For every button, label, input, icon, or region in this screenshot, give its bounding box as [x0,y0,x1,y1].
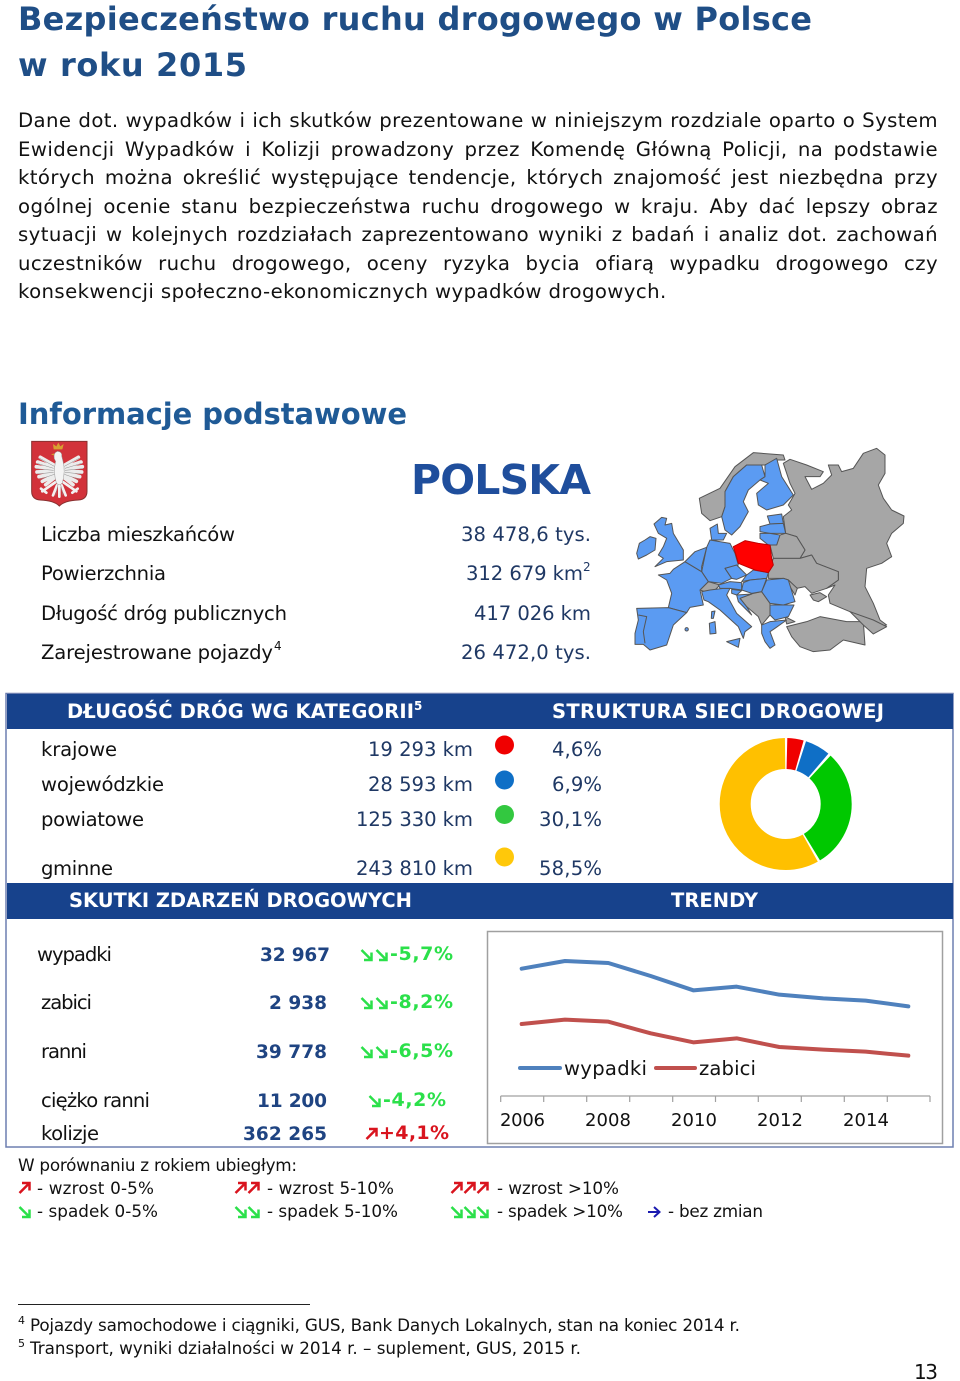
heading: Informacje podstawowe: Informacje podstawowe [18,397,407,431]
table: road lengths by category: gminne [41,857,113,880]
body text paragraph: konsekwencji społeczno-ekonomicznych wypadków drogowych. [18,280,667,303]
chart axis: 2006 [500,1110,545,1131]
legend: year over year comparison: - spadek 5-10% [267,1201,398,1221]
body text paragraph [18,109,938,303]
table: basic information: 312 679 km [466,562,583,585]
chart axis: 2010 [671,1110,717,1131]
table: basic information: 26 472,0 tys. [461,641,591,664]
table: road accident effects: 32 967 [260,945,330,966]
header bar: road lengths and network structure: DŁUGOŚĆ DRÓG WG KATEGORII [67,699,414,723]
table: basic information: 417 026 km [474,602,591,625]
legend: year over year comparison: - wzrost 5-10% [267,1178,394,1198]
table: road accident effects: ranni [41,1040,87,1063]
table: road lengths by category: 243 810 km [356,857,473,880]
map: Poland highlighted [733,541,773,573]
body text paragraph: uczestników ruchu drogowego, oceny ryzyka bycia ofiarą wypadku drogowego czy [18,252,938,274]
header bar: road lengths and network structure: STRUKTURA SIECI DROGOWEJ [552,700,884,723]
footnotes [18,1304,740,1358]
donut chart: road network structure [735,754,836,854]
table: road lengths by category: 58,5% [539,857,602,880]
body text paragraph: których można określić występujące tendencje, których znajomość jest niezbędna przy [18,166,938,189]
icon: Polish coat of arms [32,441,87,506]
table: road accident effects: 39 778 [256,1042,327,1063]
table: road accident effects: +4,1% [379,1122,449,1144]
map of Europe [635,448,904,652]
chart axis: 2014 [843,1110,889,1131]
table: basic information: Zarejestrowane pojazdy [41,641,273,664]
chart line: zabici [522,1020,908,1056]
body text paragraph: sytuacji w kolejnych rozdziałach zaprezentowano wyniki z badań i analiz dot. zachowań [18,223,938,246]
title: w roku 2015 [18,46,247,84]
table: basic information: Liczba mieszkańców [41,523,235,546]
table: road lengths by category: krajowe [41,738,117,761]
legend: year over year comparison: - bez zmian [668,1201,763,1221]
footnotes: 5 [18,1337,25,1350]
table: road accident effects: -5,7% [390,943,453,965]
header bar: road lengths and network structure: 5 [414,699,422,713]
table: road lengths by category [41,736,602,880]
table: road lengths by category: 6,9% [552,773,602,796]
table: road accident effects: ciężko ranni [41,1089,150,1112]
legend: year over year comparison [18,1155,763,1221]
legend: year over year comparison: W porównaniu z rokiem ubiegłym: [18,1155,297,1175]
footnotes: Transport, wyniki działalności w 2014 r. – suplement, GUS, 2015 r. [29,1338,581,1358]
title [18,0,812,84]
chart axis: 2012 [757,1110,803,1131]
legend: year over year comparison: - wzrost >10% [497,1178,619,1198]
table: road accident effects: 2 938 [269,993,327,1014]
body text paragraph: ogólnej ocenie stanu bezpieczeństwa ruchu drogowego w kraju. Aby dać lepszy obraz [18,194,938,218]
table: road accident effects: -6,5% [390,1040,453,1062]
map: EU countries [635,458,795,650]
title: Bezpieczeństwo ruchu drogowego w Polsce [18,0,812,38]
table: basic information: Długość dróg publicznych [41,602,287,625]
table: road lengths by category: powiatowe [41,808,144,831]
table: road lengths by category: 4,6% [552,738,602,761]
table: basic information: 2 [583,560,591,574]
table: road lengths by category: wojewódzkie [41,773,164,796]
body text paragraph: Dane dot. wypadków i ich skutków prezentowane w niniejszym rozdziale oparto o System [18,109,938,132]
chart axis: 2008 [585,1110,631,1131]
chart axis [500,1096,930,1131]
header bar: effects and trends [7,883,953,919]
line chart: trends [488,932,942,1144]
table: road accident effects: 362 265 [243,1124,327,1145]
table: basic information: 38 478,6 tys. [461,523,591,546]
table: basic information: Powierzchnia [41,562,166,585]
header bar: effects and trends: TRENDY [671,889,759,912]
table: road accident effects: -4,2% [383,1089,446,1111]
heading: POLSKA: POLSKA [411,456,591,504]
table: road lengths by category: 28 593 km [368,773,473,796]
chart line: wypadki [522,961,908,1006]
outer frame [6,694,953,1147]
footnotes: Pojazdy samochodowe i ciągniki, GUS, Bank Danych Lokalnych, stan na koniec 2014 r. [30,1315,740,1335]
table: road accident effects: kolizje [41,1122,99,1145]
table: basic information [41,523,591,664]
legend: year over year comparison: - spadek >10% [497,1201,623,1221]
footnotes: 4 [18,1314,25,1327]
chart legend [520,1057,756,1080]
trend indicators [362,950,386,1106]
table: road lengths by category: 125 330 km [356,808,473,831]
map: non-EU countries [699,448,904,652]
table: road accident effects: zabici [41,991,92,1014]
table: basic information: 4 [274,639,282,653]
table: road accident effects: wypadki [37,943,112,966]
table: road accident effects: -8,2% [390,991,453,1013]
legend arrows [20,1183,660,1217]
header bar: road lengths and network structure [7,694,953,729]
chart legend: wypadki [564,1057,647,1080]
table: road lengths by category: 19 293 km [368,738,473,761]
chart legend: zabici [699,1057,756,1080]
legend: year over year comparison: - wzrost 0-5% [37,1178,154,1198]
header bar: effects and trends: SKUTKI ZDARZEŃ DROGOWYCH [69,889,412,912]
table: road accident effects [37,943,453,1145]
body text paragraph: Ewidencji Wypadków i Kolizji prowadzony przez Komendę Główną Policji, na podstawie [18,138,938,160]
legend: year over year comparison: - spadek 0-5% [37,1201,158,1221]
table: road accident effects: 11 200 [257,1091,327,1112]
table: road lengths by category: 30,1% [539,808,602,831]
